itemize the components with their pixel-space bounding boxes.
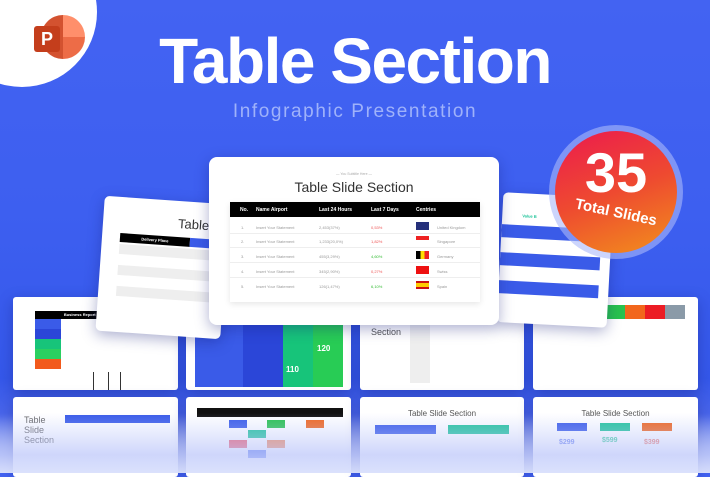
table: Last 7 Days: [371, 207, 399, 213]
table: 2.: [241, 239, 244, 244]
table: 455(3,29%): [319, 254, 340, 259]
thumb 3: slide section with checks: [360, 297, 524, 390]
bottom fade: [0, 413, 710, 473]
thumb 3: slide section with checks: Slide: [371, 317, 391, 327]
table: Insert Your Statement: [256, 254, 294, 259]
table: 3.: [241, 254, 244, 259]
table: 1,233(20,0%): [319, 239, 343, 244]
thumb 2: blue and green grid: 120: [317, 344, 330, 353]
thumb 1: business report: [13, 297, 178, 390]
thumb 8: pricing: $399: [644, 439, 660, 446]
table: Swiss: [437, 269, 447, 274]
table: Insert Your Statement: [256, 269, 294, 274]
thumb 8: pricing: $299: [559, 439, 575, 446]
thumb 7: two tables: [360, 397, 524, 477]
subtitle: Infographic Presentation: [233, 101, 477, 122]
table: United Kingdom: [437, 225, 465, 230]
title: Table Section: [159, 25, 551, 97]
thumb 5: product table: [13, 397, 178, 477]
table: No.: [240, 207, 248, 213]
thumb 1: business report: Business Report Of 2024: [64, 312, 111, 317]
left back slide: delivery table: Table: [178, 216, 210, 233]
table: 0,53%: [371, 225, 382, 230]
thumb 2: blue and green grid: [186, 297, 351, 390]
slide heading: Table Slide Section: [294, 179, 414, 195]
icon: powerpoint: P: [41, 29, 53, 49]
thumb 5: product table: Section: [24, 435, 54, 445]
table: Insert Your Statement: [256, 225, 294, 230]
thumbnail grid: [7, 295, 704, 477]
table: 345(2,90%): [319, 269, 340, 274]
table: 126(1,47%): [319, 284, 340, 289]
table: 1,82%: [371, 239, 382, 244]
table: Insert Your Statement: [256, 239, 294, 244]
left back slide: delivery table: [95, 196, 230, 339]
table: 0,27%: [371, 269, 382, 274]
table: Germany: [437, 254, 453, 259]
icon: powerpoint: [34, 15, 85, 59]
table: Last 24 Hours: [319, 207, 352, 213]
table: 5.: [241, 284, 244, 289]
slide subtitle: — You Subtitle Here —: [336, 172, 372, 176]
right back slide: value table: Value B: [522, 213, 537, 219]
table: 4.: [241, 269, 244, 274]
table: Insert Your Statement: [256, 284, 294, 289]
thumb 8: pricing: Table Slide Section: [581, 409, 650, 418]
badge: 35 total slides: Total Slides: [574, 196, 658, 229]
table: Centries: [416, 207, 436, 213]
logo badge: white circle with PowerPoint icon: [0, 0, 97, 87]
table: 1.: [241, 225, 244, 230]
thumb 7: two tables: Table Slide Section: [408, 409, 476, 418]
left back slide: delivery table: Delivery Place: [141, 236, 169, 243]
center slide: airport table: [209, 157, 499, 325]
table: Spain: [437, 284, 447, 289]
table: 2,453(37%): [319, 225, 340, 230]
table: Name Airport: [256, 207, 288, 213]
badge: 35 total slides: 35: [585, 141, 647, 204]
badge: 35 total slides: [549, 125, 683, 259]
right back slide: value table: [497, 192, 613, 328]
table: Singapore: [437, 239, 455, 244]
thumb 5: product table: Table: [24, 415, 46, 425]
thumb 5: product table: Slide: [24, 425, 44, 435]
thumb 2: blue and green grid: 110: [286, 365, 299, 374]
table: 6,10%: [371, 284, 382, 289]
thumb 6: schedule table: [186, 397, 351, 477]
thumb 8: pricing: [533, 397, 698, 477]
table: 4,60%: [371, 254, 382, 259]
thumb 8: pricing: $599: [602, 437, 618, 444]
table: [230, 202, 480, 302]
thumb 3: slide section with checks: Section: [371, 327, 401, 337]
thumb 4: colored date boxes: [533, 297, 698, 390]
